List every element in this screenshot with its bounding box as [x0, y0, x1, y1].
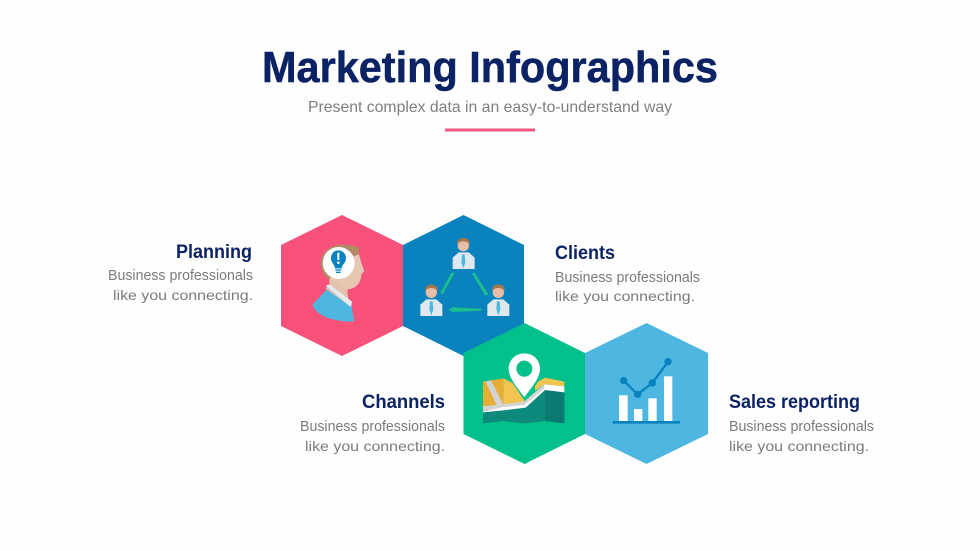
- panel: sales reporting text: [729, 392, 874, 454]
- panel: planning text: like you connecting.: [113, 287, 253, 303]
- panel: channels text: Channels: [362, 392, 445, 413]
- person left: [420, 284, 442, 316]
- icon: head with lightbulb: [313, 245, 364, 322]
- title: Marketing Infographics: [262, 43, 718, 92]
- panel: sales reporting text: like you connecting.: [729, 438, 869, 454]
- hexagon: clients: [403, 215, 524, 356]
- panel: channels text: Business professionals: [300, 419, 445, 435]
- panel: planning text: Planning: [176, 242, 252, 263]
- subtitle: Present complex data in an easy-to-understand way: [308, 99, 672, 116]
- panel: sales reporting text: Sales reporting: [729, 392, 860, 413]
- hexagon: sales reporting: [585, 323, 708, 464]
- panel: sales reporting text: Business professionals: [729, 419, 874, 435]
- title underline accent: [445, 128, 535, 132]
- panel: planning text: [108, 242, 253, 303]
- person right: [487, 284, 509, 316]
- panel: clients text: like you connecting.: [555, 288, 695, 304]
- hexagon: planning: [281, 215, 403, 356]
- panel: clients text: Clients: [555, 243, 615, 264]
- connection arrows: [440, 272, 488, 312]
- icon: bar and line chart: [613, 358, 680, 424]
- panel: channels text: like you connecting.: [305, 438, 445, 454]
- person top: [453, 238, 475, 269]
- panel: channels text: [300, 392, 445, 454]
- panel: planning text: Business professionals: [108, 268, 253, 284]
- panel: clients text: Business professionals: [555, 270, 700, 286]
- hexagon: channels: [464, 323, 585, 464]
- icon: map with location pin: [483, 353, 564, 423]
- icon: three connected people: [420, 238, 509, 316]
- panel: clients text: [555, 243, 700, 304]
